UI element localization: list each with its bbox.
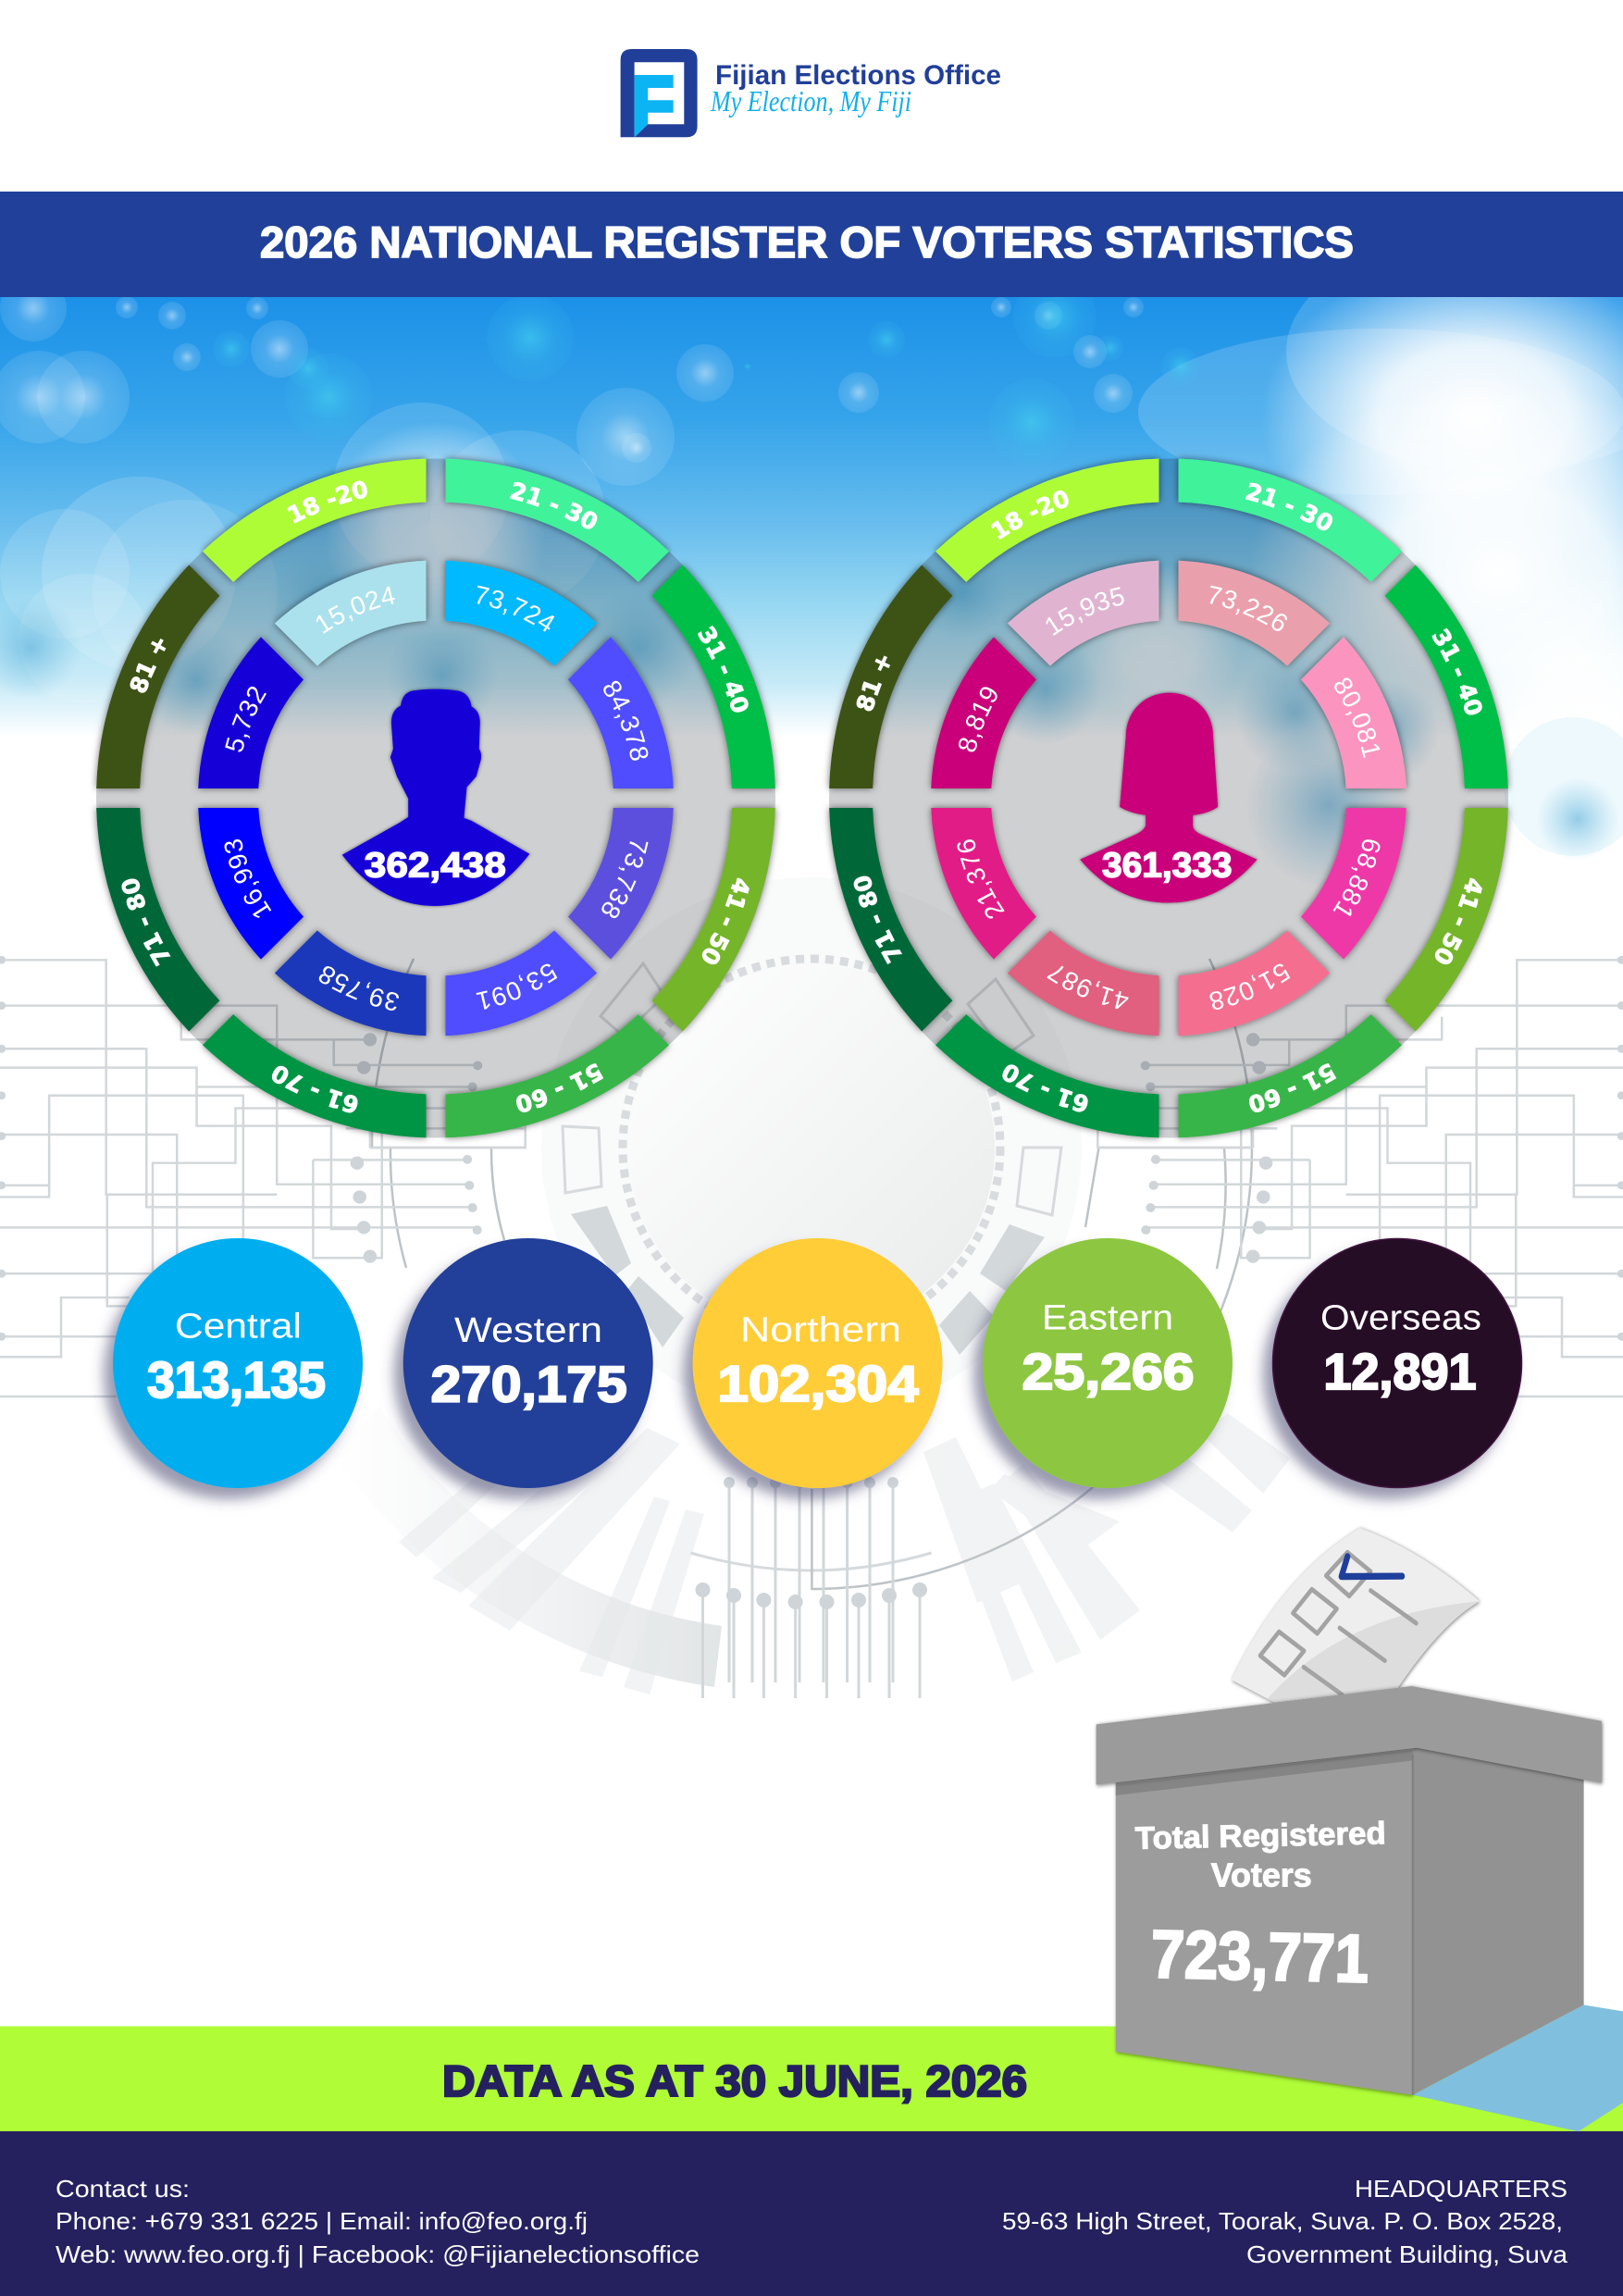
segment: 81+ male: 5,732 [225,687,266,752]
ring segments female [824,453,1514,1143]
segment: 81+ female [824,562,1039,794]
segment: 18-20 female [933,453,1164,668]
division: Western: 270,175 [431,1355,627,1412]
segment: 18-20 male: 18 -20 [287,481,367,524]
division: Overseas: Overseas [1320,1299,1481,1338]
technology circle background [331,877,1290,1694]
segment: 18-20 male [200,453,431,669]
segment: 31-40 female: 31 - 40 [1432,627,1482,714]
segment: 31-40 female: 80,081 [1334,677,1381,758]
headquarters address: 59-63 High Street, Toorak, Suva. P. O. Box 2528, [1002,2207,1563,2235]
segment: 51-60 male: 53,091 [476,964,557,1010]
segment: 41-50 male [564,803,781,1035]
ballot box [1096,1528,1623,2131]
segment: 31-40 male: 84,378 [603,681,648,761]
panel: female voters ring [824,453,1514,1143]
box body [1116,1737,1623,2131]
segment: 71-80 male: 16,993 [224,839,272,918]
segment: 18-20 female: 15,935 [1046,587,1124,636]
segment: 21-30 female [1173,453,1405,669]
segment: 61-70 male: 61 - 70 [272,1066,357,1112]
contact details: Web: www.feo.org.fj | Facebook: @Fijianelectionsoffice [56,2240,700,2268]
footer [0,2131,1623,2296]
segment: 61-70 male [200,927,431,1143]
segment: 71-80 male: 71 - 80 [122,879,170,967]
icon: male silhouette [342,689,529,906]
contact details [56,2175,700,2268]
division: Eastern [983,1238,1233,1488]
circuit pins bottom [696,1477,927,1698]
division: Northern: 102,304 [718,1355,919,1412]
sky background [0,231,1623,870]
segment: 41-50 female: 41 - 50 [1434,877,1482,964]
total registered voters text: 723,771 [1150,1917,1369,1997]
segment: 71-80 female: 71 - 80 [853,875,902,964]
segment: 51-60 male: 51 - 60 [516,1063,603,1112]
ring backing [829,459,1508,1138]
segment: 51-60 female: 51 - 60 [1249,1063,1336,1112]
logo mark [621,49,698,137]
data date strip [0,2027,1623,2131]
segment: 61-70 female: 41,987 [1047,966,1129,1009]
division: Western: Western [454,1311,602,1350]
headquarters address: Government Building, Suva [1246,2240,1568,2268]
segment: 41-50 male: 73,738 [601,841,648,918]
total registered voters text: Voters [1211,1856,1312,1894]
segment: 21-30 male: 73,724 [477,585,555,632]
division: Northern [693,1238,943,1488]
segment: 21-30 male: 21 - 30 [510,481,598,529]
segment: 21-30 male [440,453,672,669]
division: Central [113,1238,363,1488]
contact details: Contact us: [56,2175,190,2203]
segment: 71-80 female [824,803,1040,1035]
division: Central: Central [175,1307,302,1346]
segment: 81+ male: 81 + [130,639,167,693]
segment: 71-80 male [91,803,307,1035]
tagline: My Election, My Fiji [710,84,911,118]
segment: 41-50 male: 41 - 50 [701,877,750,964]
contact details: Phone: +679 331 6225 | Email: info@feo.org.fj [56,2207,588,2235]
segment: 21-30 female: 21 - 30 [1245,483,1332,531]
total registered voters text [1134,1816,1386,1997]
segment: 61-70 male: 39,758 [318,966,399,1011]
segment: 41-50 female [1297,803,1514,1035]
total registered voters text: Total Registered [1134,1816,1386,1856]
segment: 31-40 male: 31 - 40 [698,626,749,713]
segment: 31-40 male [564,562,781,794]
division: Eastern: Eastern [1042,1299,1173,1338]
title: 2026 NATIONAL REGISTER OF VOTERS STATISTICS [260,217,1354,267]
division: Eastern: 25,266 [1022,1343,1195,1400]
division: Northern: Northern [740,1311,901,1350]
segment: 81+ male [91,562,307,794]
division: Overseas [1273,1238,1521,1488]
segment: 41-50 female: 68,881 [1332,839,1381,916]
segment: 51-60 female [1173,927,1405,1143]
division: Central: 313,135 [147,1351,326,1409]
divisions row [113,1238,1521,1488]
data date text: DATA AS AT 30 JUNE, 2026 [442,2056,1027,2105]
segment: 71-80 female: 21,376 [957,839,1005,918]
female total: 361,333 [1102,847,1233,886]
bokeh lower right [1235,652,1623,888]
box lid [1096,1686,1602,1785]
headquarters address: HEADQUARTERS [1355,2175,1567,2203]
panel: male voters ring [91,453,781,1143]
logo: Fijian Elections Office [621,49,1001,137]
segment: 61-70 female [933,927,1164,1143]
segment: 21-30 female: 73,226 [1210,585,1287,631]
segment: 51-60 female: 51,028 [1209,964,1290,1010]
circuit lines left [0,956,526,1396]
segment: 31-40 female [1297,562,1514,794]
segment: 61-70 female: 61 - 70 [1002,1064,1088,1112]
icon: female silhouette [1080,693,1258,902]
title band [0,192,1623,297]
segment: 51-60 male [440,927,672,1143]
division: Western [403,1238,653,1488]
ballot paper [1232,1528,1480,1702]
male total: 362,438 [365,847,506,886]
segment: 18-20 female: 18 -20 [990,490,1069,540]
segment: 81+ female: 8,819 [959,687,997,751]
segment: 81+ female: 81 + [857,655,890,711]
segment: 18-20 male: 15,024 [316,587,395,634]
ring segments male [91,453,781,1143]
headquarters address [1002,2175,1568,2268]
ring backing [96,459,775,1138]
organisation name: Fijian Elections Office [715,60,1001,91]
division: Overseas: 12,891 [1323,1343,1477,1400]
